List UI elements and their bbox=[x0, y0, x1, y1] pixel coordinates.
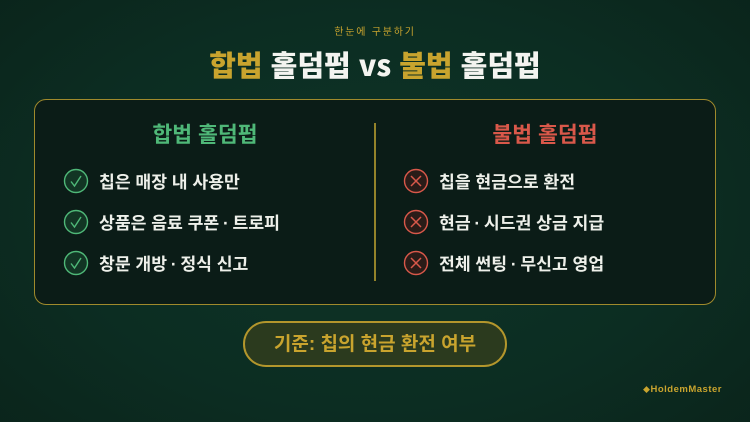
illegal item 3: 전체 썬팅 · 무신고 영업 bbox=[439, 254, 604, 274]
icon: cross bbox=[404, 210, 428, 234]
criterion text: 기준: 칩의 현금 환전 여부 bbox=[274, 334, 476, 355]
legal item 3 bbox=[64, 250, 248, 276]
legal item 3: 창문 개방 · 정식 신고 bbox=[99, 254, 248, 274]
icon: cross bbox=[404, 250, 428, 276]
illegal item 1 bbox=[404, 168, 575, 194]
illegal item 3 bbox=[404, 250, 604, 276]
illegal item 2: 현금 · 시드권 상금 지급 bbox=[439, 212, 604, 232]
logo: ◆HoldemMaster bbox=[643, 384, 722, 395]
icon: check bbox=[64, 168, 88, 194]
icon: cross bbox=[404, 168, 428, 194]
icon: check bbox=[64, 250, 88, 276]
legal item 2: 상품은 음료 쿠폰 · 트로피 bbox=[99, 212, 280, 232]
subtitle: 한눈에 구분하기 bbox=[334, 27, 416, 38]
legal item 1 bbox=[64, 168, 240, 194]
heading: legal: 합법 홀덤펍 bbox=[152, 122, 258, 147]
illegal item 1: 칩을 현금으로 환전 bbox=[439, 172, 575, 192]
criterion pill bbox=[243, 321, 507, 367]
title: 합법 홀덤펍 vs 불법 홀덤펍 bbox=[209, 43, 541, 85]
icon: check bbox=[64, 210, 88, 234]
legal item 1: 칩은 매장 내 사용만 bbox=[99, 172, 240, 192]
illegal item 2 bbox=[404, 210, 604, 234]
legal item 2 bbox=[64, 210, 280, 234]
divider bbox=[374, 123, 376, 281]
panel: comparison bbox=[34, 99, 716, 305]
heading: illegal: 불법 홀덤펍 bbox=[492, 122, 598, 147]
